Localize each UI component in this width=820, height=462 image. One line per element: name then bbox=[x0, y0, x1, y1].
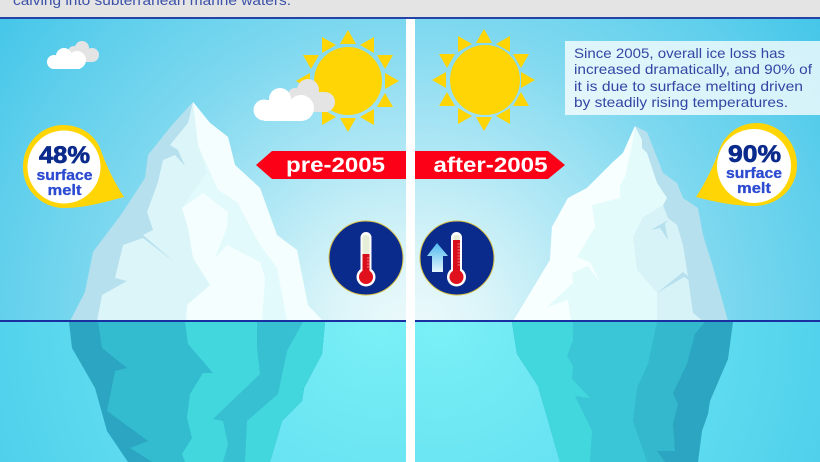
callout: 90% surface melt: melt bbox=[737, 181, 771, 197]
header strip with caption bbox=[0, 0, 820, 19]
callout: explanatory text: increased dramatically, and 90% of bbox=[574, 61, 812, 77]
callout: 90% surface melt: 90% bbox=[728, 141, 781, 168]
panel: after-2005 sky bbox=[415, 19, 820, 321]
callout: 48% surface melt: 48% bbox=[39, 142, 90, 169]
arrow label: after-2005 bbox=[415, 151, 565, 179]
icon: sun left bbox=[296, 30, 399, 132]
iceberg: pre-2005 below water bbox=[69, 322, 325, 462]
waterline right bbox=[415, 320, 820, 322]
callout: explanatory text: Since 2005, overall ice loss has bbox=[574, 45, 785, 61]
arrow label: after-2005: after-2005 bbox=[434, 154, 548, 177]
icon: thermometer badge, moderate bbox=[329, 221, 403, 295]
iceberg: after-2005 above water bbox=[513, 126, 728, 321]
panel: pre-2005 water bbox=[0, 322, 406, 462]
panel: after-2005 water bbox=[415, 322, 820, 462]
arrow label: pre-2005: pre-2005 bbox=[286, 154, 385, 177]
callout: 90% surface melt bbox=[696, 123, 797, 206]
callout: explanatory text: by steadily rising temperatures. bbox=[574, 94, 788, 110]
callout: 90% surface melt: surface bbox=[726, 166, 782, 182]
callout: 48% surface melt: melt bbox=[48, 183, 82, 199]
callout: explanatory text: it is due to surface melting driven bbox=[574, 78, 803, 94]
panel: pre-2005 sky bbox=[0, 19, 406, 321]
icon: small cloud bbox=[47, 41, 99, 69]
callout: 48% surface melt bbox=[23, 125, 124, 208]
waterline left bbox=[0, 320, 406, 322]
callout: explanatory text bbox=[565, 41, 820, 115]
iceberg: after-2005 below water bbox=[512, 322, 733, 462]
icon: sun right bbox=[432, 29, 535, 131]
arrow label: pre-2005 bbox=[256, 151, 406, 179]
icon: thermometer badge, rising bbox=[420, 221, 494, 295]
icon: large cloud bbox=[254, 79, 335, 121]
callout: 48% surface melt: surface bbox=[36, 168, 92, 184]
iceberg: pre-2005 above water bbox=[70, 102, 323, 321]
